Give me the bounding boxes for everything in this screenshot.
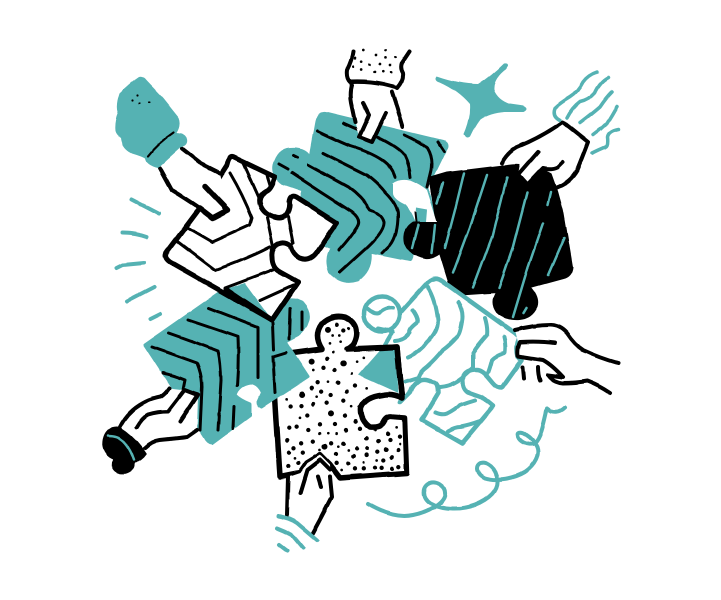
teal rays at left <box>117 200 160 319</box>
hand: right holding wavy piece <box>515 325 618 393</box>
teal wavy motion lines <box>554 72 618 153</box>
hand: lower left with black cuff <box>103 388 198 473</box>
teal cuff lines <box>277 516 317 551</box>
teal corner under white piece <box>226 283 270 317</box>
puzzle piece: dotted white <box>275 316 407 478</box>
hand: upper left holding white piece <box>160 149 228 218</box>
teal triangle on dotted piece <box>358 349 398 393</box>
puzzle piece: black striped <box>393 164 572 319</box>
puzzle piece: white chevrons <box>166 157 337 320</box>
hand: bottom holding dotted piece <box>277 455 332 551</box>
puzzle piece: lower left teal striped <box>145 287 308 443</box>
puzzle piece: wavy outline teal <box>364 278 522 443</box>
hand: top right holding black piece <box>502 122 588 187</box>
puzzle piece: top teal striped <box>274 113 447 281</box>
notch in teal piece <box>393 179 437 222</box>
hand: top holding teal piece <box>347 50 410 142</box>
patterned sleeve <box>347 51 410 88</box>
teal sleeve: upper left <box>115 77 188 168</box>
teal curly squiggle <box>368 408 565 516</box>
teal four-point star <box>436 63 527 138</box>
black cuff <box>103 427 146 473</box>
